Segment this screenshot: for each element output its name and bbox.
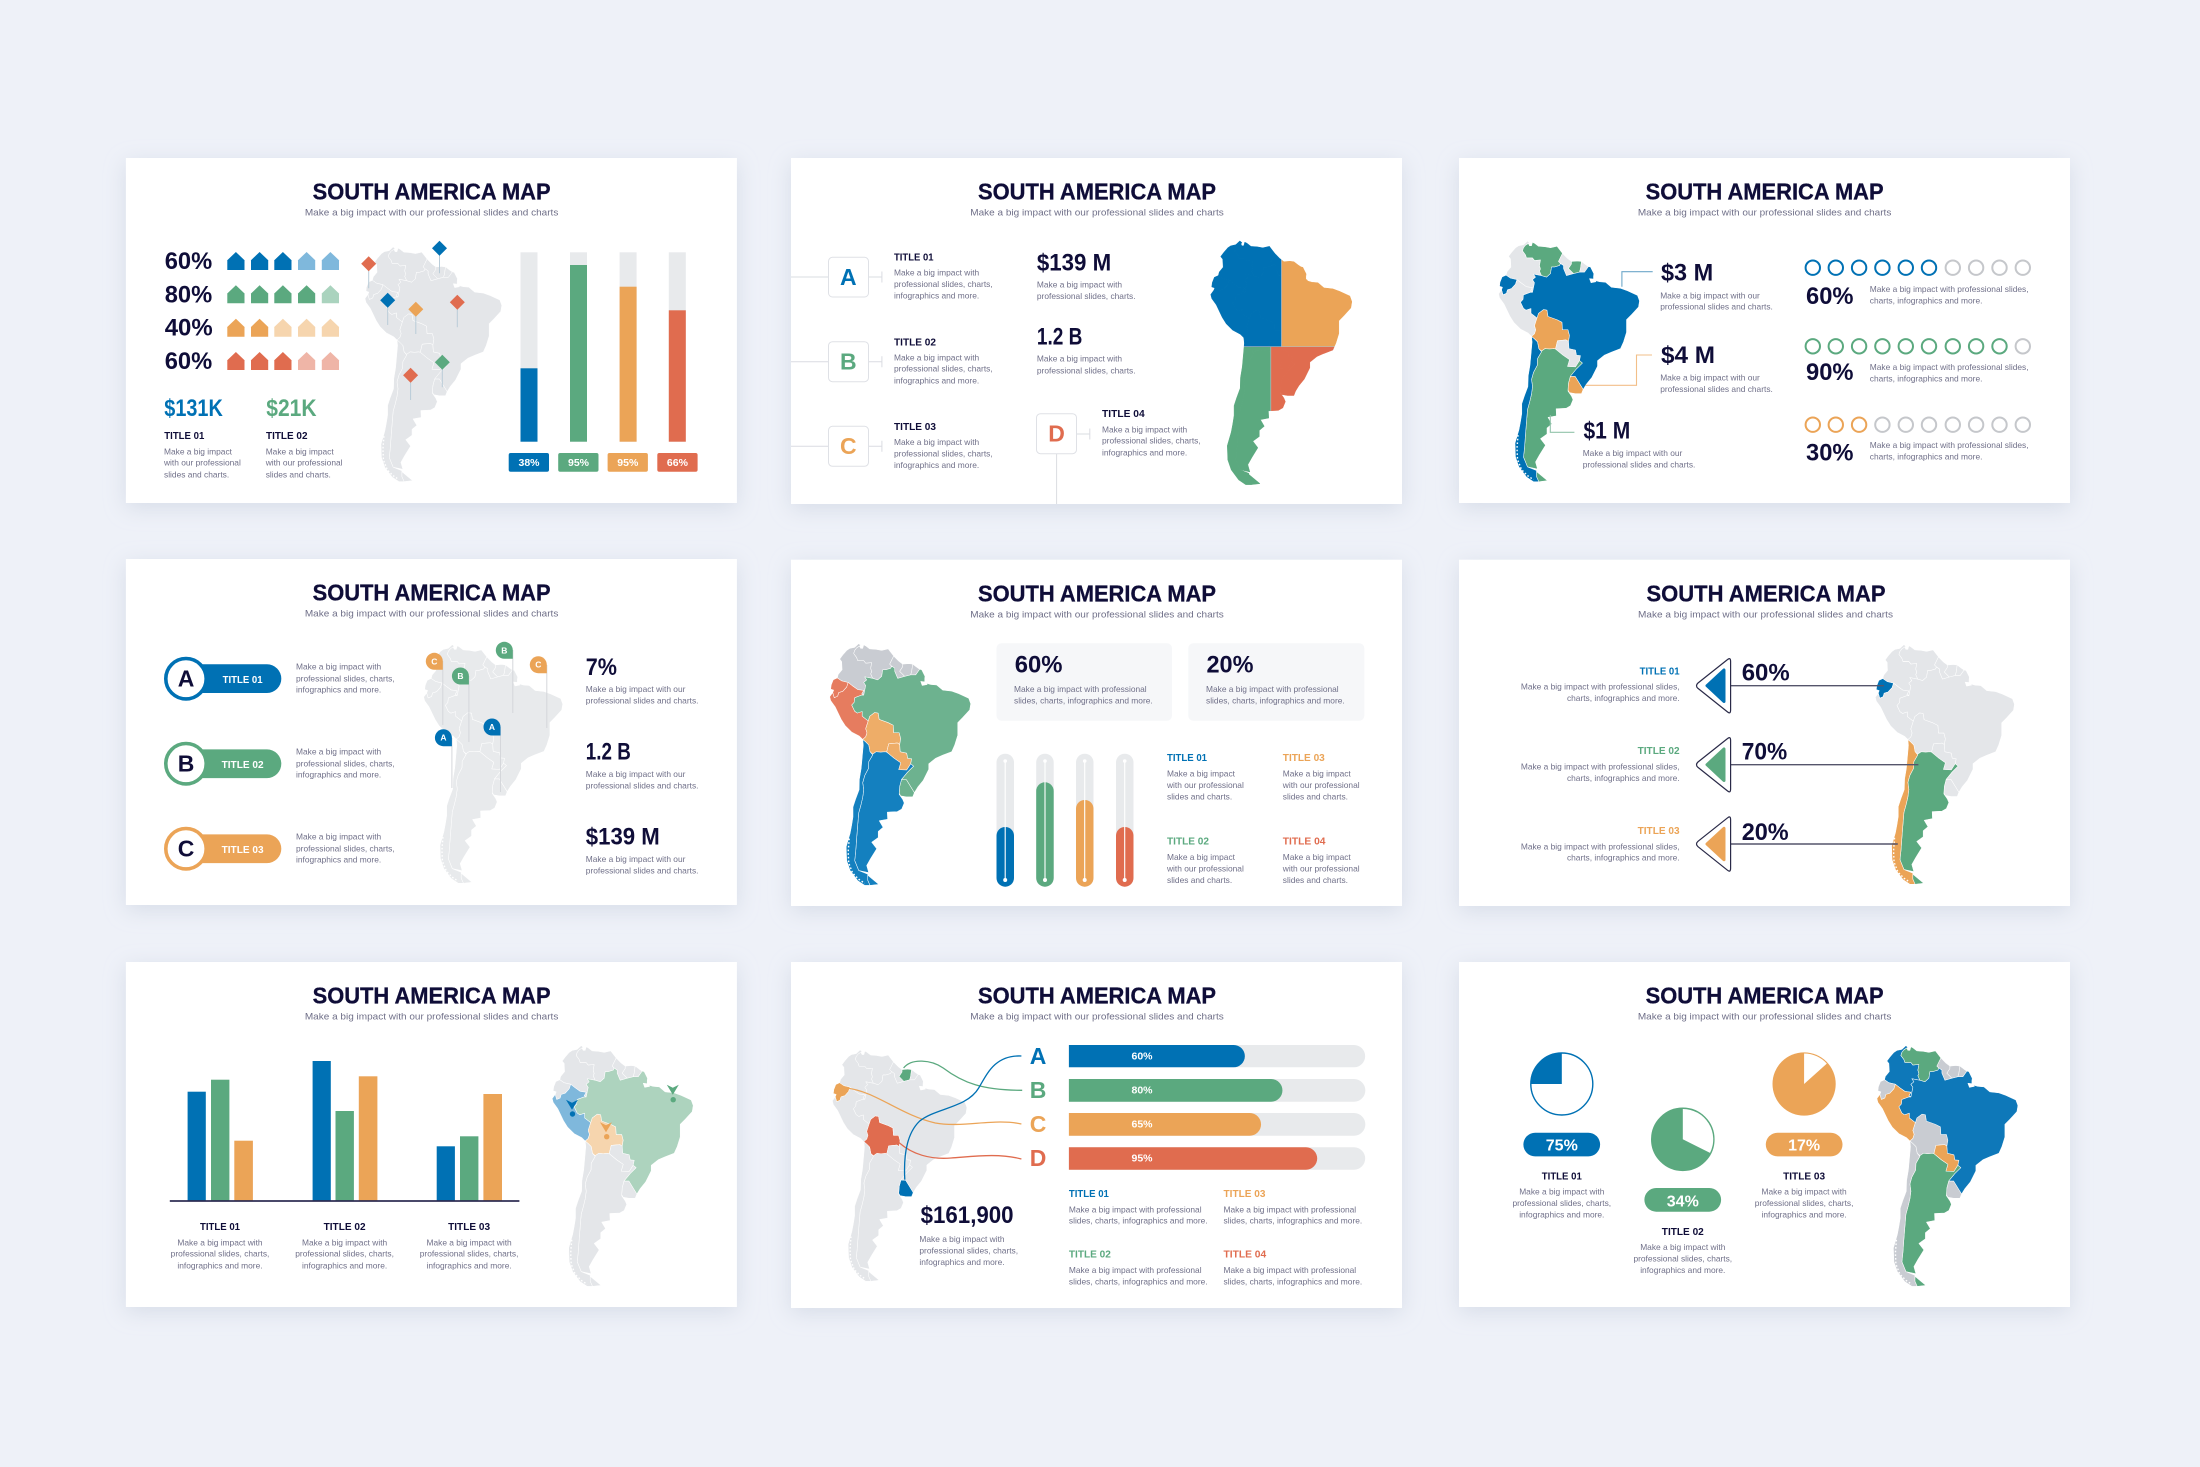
stat $1 M xyxy=(1583,417,1695,470)
teardrop pins: B xyxy=(501,645,507,655)
text title 03 xyxy=(1224,1188,1362,1226)
text block A: Make a big impact with xyxy=(296,662,382,672)
text title 02: Make a big impact with xyxy=(302,1237,388,1247)
text A: Make a big impact with xyxy=(894,268,980,278)
text 60%: Make a big impact with professional slides, xyxy=(1870,284,2029,294)
pie 75%: 75% xyxy=(1546,1138,1578,1155)
teardrop pins: A xyxy=(489,722,495,732)
box C xyxy=(828,426,868,466)
stat $131K xyxy=(163,395,241,479)
text title 03: with our professional xyxy=(1282,780,1360,790)
text title 01: Make a big impact with xyxy=(177,1237,263,1247)
box A: A xyxy=(840,264,857,290)
heading: SOUTH AMERICA MAP xyxy=(978,982,1216,1008)
text A xyxy=(894,252,993,301)
stat box 20% xyxy=(1188,643,1364,721)
text block C: infographics and more. xyxy=(296,855,381,865)
stat $4 M: $4 M xyxy=(1661,342,1715,369)
text 30% xyxy=(1806,440,2029,467)
text title 01: Make a big impact with xyxy=(1519,1187,1605,1197)
text title 01: Make a big impact xyxy=(1167,769,1236,779)
stat 7%: 7% xyxy=(586,654,617,681)
dots 60% xyxy=(1806,260,2030,275)
text C: infographics and more. xyxy=(894,460,979,470)
text D: TITLE 04 xyxy=(1102,408,1145,420)
text title 04: with our professional xyxy=(1282,863,1360,873)
text title 02 xyxy=(1166,835,1244,885)
text 90% xyxy=(1806,359,2029,386)
text title 03: TITLE 03 xyxy=(1224,1188,1266,1200)
pie 34% xyxy=(1644,1108,1721,1212)
text title 01: TITLE 01 xyxy=(200,1221,240,1233)
text 90%: charts, infographics and more. xyxy=(1870,373,1982,383)
badge C: C xyxy=(178,836,194,862)
text D: infographics and more. xyxy=(1102,447,1187,457)
stat $21K: Make a big impact xyxy=(266,446,334,456)
stat $161,900 xyxy=(919,1202,1018,1267)
dots 30% xyxy=(1806,418,2030,432)
progress bars: 65% xyxy=(1131,1119,1153,1131)
text title 03: TITLE 03 xyxy=(1283,752,1325,764)
percent row 60% red xyxy=(165,348,339,375)
text title 03: slides, charts, infographics and more. xyxy=(1224,1216,1362,1226)
text C xyxy=(894,421,993,470)
text D xyxy=(1102,408,1201,457)
stat $4 M: professional slides and charts. xyxy=(1660,384,1773,394)
text title 01: TITLE 01 xyxy=(1542,1171,1582,1183)
text D: Make a big impact with xyxy=(1102,424,1188,434)
text title 02: charts, infographics and more. xyxy=(1567,773,1680,783)
text C: professional slides, charts, xyxy=(894,448,993,458)
stat $131K: Make a big impact xyxy=(164,446,233,456)
percent row 40% orange xyxy=(165,315,339,342)
box D xyxy=(1036,414,1076,454)
map: grey South America xyxy=(365,247,502,482)
text title 04: TITLE 04 xyxy=(1283,835,1326,847)
text title 03 xyxy=(1282,752,1360,802)
stat 1.2 B xyxy=(1037,323,1136,375)
stat $131K: with our professional xyxy=(163,458,241,468)
text title 04: slides, charts, infographics and more. xyxy=(1224,1277,1362,1287)
pie 17%: 17% xyxy=(1788,1138,1820,1155)
connectors xyxy=(1550,272,1653,432)
panel: badges and teardrop pins xyxy=(126,559,737,905)
text title 01: professional slides, charts, xyxy=(171,1249,269,1259)
bar chart: 38% xyxy=(518,457,540,469)
text title 04 xyxy=(1282,835,1360,885)
text title 02 xyxy=(1521,745,1680,783)
text title 03: TITLE 03 xyxy=(448,1221,490,1233)
heading: SOUTH AMERICA MAP xyxy=(313,982,551,1008)
stat $3 M: Make a big impact with our xyxy=(1660,290,1760,300)
map: multi colored xyxy=(830,644,971,885)
stat $3 M: professional slides and charts. xyxy=(1660,302,1773,312)
text title 03 xyxy=(1521,825,1680,863)
text title 03: infographics and more. xyxy=(426,1260,512,1270)
letters A B C D: A xyxy=(1030,1043,1046,1069)
teardrop pins: B xyxy=(457,671,463,681)
text block C: professional slides, charts, xyxy=(296,843,395,853)
text title 02: TITLE 02 xyxy=(1069,1249,1111,1261)
map: multi colored xyxy=(1877,1046,2018,1286)
stat $139 M: professional slides and charts. xyxy=(586,865,698,875)
progress bars: 80% xyxy=(1131,1085,1153,1097)
text title 04: TITLE 04 xyxy=(1224,1249,1266,1261)
text title 02 xyxy=(295,1221,394,1270)
progress bars: 60% xyxy=(1131,1050,1153,1062)
text block A: infographics and more. xyxy=(296,685,381,695)
subtitle: Make a big impact with our professional slides and charts xyxy=(970,610,1224,621)
badge A: TITLE 01 xyxy=(223,674,263,686)
map markers xyxy=(566,1085,679,1139)
text title 01 xyxy=(1166,752,1244,802)
text title 01: slides, charts, infographics and more. xyxy=(1069,1216,1208,1226)
text title 02: TITLE 02 xyxy=(1662,1226,1704,1238)
card xyxy=(791,158,1402,504)
stat $161,900: Make a big impact with xyxy=(919,1234,1005,1244)
stat $161,900: $161,900 xyxy=(921,1202,1014,1229)
stat $4 M xyxy=(1660,342,1773,394)
thermometer chart xyxy=(996,754,1134,887)
text title 01 xyxy=(1512,1171,1611,1220)
card xyxy=(791,560,1402,906)
letters A B C D: D xyxy=(1030,1145,1046,1171)
stat 7%: Make a big impact with our xyxy=(586,684,686,694)
text title 04 xyxy=(1224,1249,1362,1287)
stat $3 M xyxy=(1660,260,1773,312)
text B: infographics and more. xyxy=(894,375,979,385)
card xyxy=(1459,158,2070,503)
stat $21K: with our professional xyxy=(265,458,343,468)
leader lines xyxy=(1731,686,1918,844)
letters A B C D xyxy=(1030,1043,1046,1171)
text B: TITLE 02 xyxy=(894,336,936,348)
stat $21K: $21K xyxy=(266,395,317,422)
stat $139 M: professional slides, charts. xyxy=(1037,291,1136,301)
text 60% xyxy=(1806,283,2029,310)
stat $21K: TITLE 02 xyxy=(266,430,308,442)
text title 01: Make a big impact with professional xyxy=(1069,1204,1202,1214)
heading: SOUTH AMERICA MAP xyxy=(313,579,551,605)
stat 1.2 B: 1.2 B xyxy=(1037,323,1082,350)
subtitle: Make a big impact with our professional slides and charts xyxy=(970,1012,1224,1023)
text title 01: charts, infographics and more. xyxy=(1567,693,1680,703)
text title 03: Make a big impact with professional xyxy=(1224,1204,1356,1214)
stat $1 M: professional slides and charts. xyxy=(1583,460,1695,470)
percent row 60% blue xyxy=(165,248,339,275)
text 90%: Make a big impact with professional slides, xyxy=(1870,362,2029,372)
stat $161,900: infographics and more. xyxy=(919,1257,1005,1267)
badge B: TITLE 02 xyxy=(222,759,264,771)
teardrop pins xyxy=(426,642,547,792)
stat box 60% xyxy=(996,643,1172,721)
badge C: TITLE 03 xyxy=(222,844,264,856)
subtitle: Make a big impact with our professional slides and charts xyxy=(1638,207,1892,218)
text C: Make a big impact with xyxy=(894,437,980,447)
box D: D xyxy=(1048,421,1065,447)
badge B xyxy=(166,744,281,784)
text 30%: Make a big impact with professional slides, xyxy=(1870,440,2029,450)
text D: professional slides, charts, xyxy=(1102,436,1201,446)
stat $131K: TITLE 01 xyxy=(164,430,204,442)
text 60%: 60% xyxy=(1806,283,1854,310)
panel: clustered bar chart xyxy=(126,962,737,1307)
stat $139 M xyxy=(586,823,698,875)
text title 03: Make a big impact with xyxy=(1762,1187,1847,1197)
panel: lettered boxes with quadrant map xyxy=(791,158,1402,504)
text A: infographics and more. xyxy=(894,291,979,301)
panel: houses, pins and bars xyxy=(126,158,737,503)
letters A B C D: C xyxy=(1030,1111,1046,1137)
stat $161,900: professional slides, charts, xyxy=(919,1246,1018,1256)
stat $21K: slides and charts. xyxy=(266,469,331,479)
text title 03: professional slides, charts, xyxy=(1755,1198,1853,1208)
text title 02: Make a big impact with professional xyxy=(1069,1265,1202,1275)
progress bars: 95% xyxy=(1131,1153,1153,1165)
stat box 60%: 60% xyxy=(1015,651,1062,678)
card xyxy=(126,962,737,1307)
map: multi colored xyxy=(1498,241,1640,482)
card xyxy=(1459,962,2070,1307)
badge A: A xyxy=(178,666,194,692)
percent row 60% blue: 60% xyxy=(165,248,212,275)
text title 02: infographics and more. xyxy=(1640,1265,1725,1275)
box B: B xyxy=(840,348,857,374)
text title 01: professional slides, charts, xyxy=(1512,1198,1611,1208)
stat $1 M: $1 M xyxy=(1584,417,1630,444)
stat $139 M xyxy=(1037,250,1136,301)
text title 04: slides and charts. xyxy=(1283,875,1348,885)
teardrop pins: C xyxy=(535,660,541,670)
text title 02: with our professional xyxy=(1166,863,1244,873)
text block B: Make a big impact with xyxy=(296,747,382,757)
badge C xyxy=(166,828,281,869)
text title 02: Make a big impact with professional slides, xyxy=(1521,761,1680,771)
stat $131K: $131K xyxy=(164,395,223,422)
text block C: Make a big impact with xyxy=(296,832,382,842)
heading: SOUTH AMERICA MAP xyxy=(978,580,1216,606)
panel: triangle arrows xyxy=(1459,560,2070,906)
stat $139 M: Make a big impact with our xyxy=(586,854,686,864)
box A xyxy=(828,257,868,297)
text title 02 xyxy=(1633,1226,1732,1275)
text title 01: TITLE 01 xyxy=(1640,665,1680,677)
stat 1.2 B xyxy=(586,738,698,790)
heading: SOUTH AMERICA MAP xyxy=(313,178,551,204)
text title 03: professional slides, charts, xyxy=(420,1249,518,1259)
stat box 20%: slides, charts, infographics and more. xyxy=(1206,696,1345,706)
text title 01 xyxy=(1521,665,1680,703)
box C: C xyxy=(840,433,857,459)
arrow 60%: 60% xyxy=(1742,659,1790,686)
card xyxy=(126,158,737,503)
subtitle: Make a big impact with our professional slides and charts xyxy=(305,1012,559,1023)
stat $21K xyxy=(265,395,343,479)
panel: dot rating rows xyxy=(1459,158,2070,503)
letters A B C D: B xyxy=(1030,1077,1046,1103)
panel: stat boxes and thermometers xyxy=(791,560,1402,906)
text title 02: Make a big impact with xyxy=(1640,1242,1726,1252)
text title 02: infographics and more. xyxy=(302,1260,387,1270)
heading: SOUTH AMERICA MAP xyxy=(978,178,1216,204)
text B xyxy=(894,336,993,385)
text B: Make a big impact with xyxy=(894,352,980,362)
stat $131K: slides and charts. xyxy=(164,469,229,479)
percent row 60% red: 60% xyxy=(165,348,212,375)
stat box 20%: Make a big impact with professional xyxy=(1206,684,1339,694)
stat box 60%: Make a big impact with professional xyxy=(1014,684,1147,694)
bar chart xyxy=(170,1061,519,1201)
text title 01: with our professional xyxy=(1166,780,1244,790)
text title 03: Make a big impact with xyxy=(427,1237,512,1247)
curved connectors xyxy=(846,1056,1022,1180)
badge B: B xyxy=(178,751,194,777)
text title 01: Make a big impact with professional slides, xyxy=(1521,682,1680,692)
text block B: infographics and more. xyxy=(296,770,381,780)
subtitle: Make a big impact with our professional slides and charts xyxy=(305,609,559,620)
panel: pie charts xyxy=(1459,962,2070,1307)
stat $4 M: Make a big impact with our xyxy=(1660,373,1760,383)
text A: professional slides, charts, xyxy=(894,279,993,289)
text title 03: infographics and more. xyxy=(1761,1210,1847,1220)
teardrop pins: A xyxy=(440,733,446,743)
text C: TITLE 03 xyxy=(894,421,936,433)
text title 01 xyxy=(171,1221,269,1270)
stat 1.2 B: professional slides, charts. xyxy=(1037,365,1136,375)
arrow 70% xyxy=(1696,738,1787,792)
bar chart: 95% xyxy=(617,457,639,469)
arrow 20%: 20% xyxy=(1742,819,1789,846)
text title 01 xyxy=(1069,1188,1208,1226)
pie 75% xyxy=(1523,1053,1600,1156)
card xyxy=(791,962,1402,1308)
stat 1.2 B: Make a big impact with our xyxy=(586,769,686,779)
text title 03: Make a big impact xyxy=(1283,769,1351,779)
text title 02: Make a big impact xyxy=(1167,852,1236,862)
bar chart: 66% xyxy=(667,457,689,469)
text 30%: 30% xyxy=(1806,440,1854,467)
badge A xyxy=(166,658,281,699)
subtitle: Make a big impact with our professional slides and charts xyxy=(1638,610,1893,621)
text title 02: slides and charts. xyxy=(1167,875,1232,885)
text title 04: Make a big impact with professional xyxy=(1224,1265,1356,1275)
stat $139 M: Make a big impact with xyxy=(1037,279,1122,289)
arrow 60% xyxy=(1696,659,1790,713)
text title 02: professional slides, charts, xyxy=(1633,1254,1732,1264)
text 30%: charts, infographics and more. xyxy=(1870,451,1982,461)
bar chart xyxy=(509,252,698,472)
text title 02 xyxy=(1069,1249,1208,1287)
text title 03: TITLE 03 xyxy=(1638,825,1680,837)
stat $3 M: $3 M xyxy=(1661,260,1713,287)
stat box 20%: 20% xyxy=(1206,651,1254,678)
dots 90% xyxy=(1806,339,2030,354)
subtitle: Make a big impact with our professional slides and charts xyxy=(305,207,559,218)
panel: letter bars with curved connectors xyxy=(791,962,1402,1308)
percent row 40% orange: 40% xyxy=(165,315,213,342)
text title 03: charts, infographics and more. xyxy=(1567,853,1680,863)
text title 03 xyxy=(420,1221,518,1270)
text title 03: slides and charts. xyxy=(1283,792,1348,802)
subtitle: Make a big impact with our professional slides and charts xyxy=(1638,1012,1892,1023)
arrow 70%: 70% xyxy=(1742,738,1787,765)
map: highlighted countries xyxy=(552,1046,693,1286)
pie 34%: 34% xyxy=(1667,1193,1699,1210)
text title 02: TITLE 02 xyxy=(1167,835,1209,847)
text A: TITLE 01 xyxy=(894,252,934,264)
map: four quadrant colors xyxy=(1208,238,1357,490)
progress bars xyxy=(1069,1045,1365,1170)
text title 01: infographics and more. xyxy=(1519,1210,1604,1220)
stat $1 M: Make a big impact with our xyxy=(1583,448,1683,458)
text title 04: Make a big impact xyxy=(1283,852,1351,862)
text title 03 xyxy=(1755,1171,1853,1220)
text block B: professional slides, charts, xyxy=(296,758,395,768)
stat 7% xyxy=(586,654,698,705)
percent row 80% green: 80% xyxy=(165,281,212,308)
map pins xyxy=(361,241,465,400)
bar chart: 95% xyxy=(568,457,590,469)
pie 17% xyxy=(1766,1052,1842,1156)
text title 01: infographics and more. xyxy=(177,1260,263,1270)
map: grey with highlighted countries xyxy=(1875,645,2014,884)
map: grey xyxy=(424,645,563,883)
text title 03: TITLE 03 xyxy=(1783,1171,1825,1183)
stat 1.2 B: professional slides and charts. xyxy=(586,780,698,790)
connector lines xyxy=(791,272,1090,504)
text block A: professional slides, charts, xyxy=(296,673,395,683)
map: highlighted countries xyxy=(832,1050,967,1281)
stat 7%: professional slides and charts. xyxy=(586,695,698,705)
text 60%: charts, infographics and more. xyxy=(1870,295,1982,305)
arrow 20% xyxy=(1696,817,1789,871)
percent row 80% green xyxy=(165,281,339,308)
text B: professional slides, charts, xyxy=(894,364,993,374)
box B xyxy=(828,342,868,382)
text title 02: slides, charts, infographics and more. xyxy=(1069,1277,1208,1287)
stat box 60%: slides, charts, infographics and more. xyxy=(1014,696,1153,706)
text title 02: professional slides, charts, xyxy=(295,1249,394,1259)
subtitle: Make a big impact with our professional slides and charts xyxy=(970,207,1224,218)
heading: SOUTH AMERICA MAP xyxy=(1646,982,1884,1008)
text title 03: Make a big impact with professional slides, xyxy=(1521,841,1680,851)
stat $139 M: $139 M xyxy=(1037,250,1111,277)
text title 01: TITLE 01 xyxy=(1167,752,1207,764)
stat 1.2 B: Make a big impact with xyxy=(1037,354,1122,364)
heading: SOUTH AMERICA MAP xyxy=(1646,580,1886,606)
stat 1.2 B: 1.2 B xyxy=(586,738,631,765)
card xyxy=(126,559,737,905)
stat $139 M: $139 M xyxy=(586,823,660,850)
heading: SOUTH AMERICA MAP xyxy=(1646,178,1884,204)
text title 02: TITLE 02 xyxy=(1638,745,1680,757)
text title 01: slides and charts. xyxy=(1167,792,1232,802)
text 90%: 90% xyxy=(1806,359,1854,386)
text title 01: TITLE 01 xyxy=(1069,1188,1109,1200)
teardrop pins: C xyxy=(431,656,437,666)
card xyxy=(1459,560,2070,906)
text title 02: TITLE 02 xyxy=(324,1221,366,1233)
